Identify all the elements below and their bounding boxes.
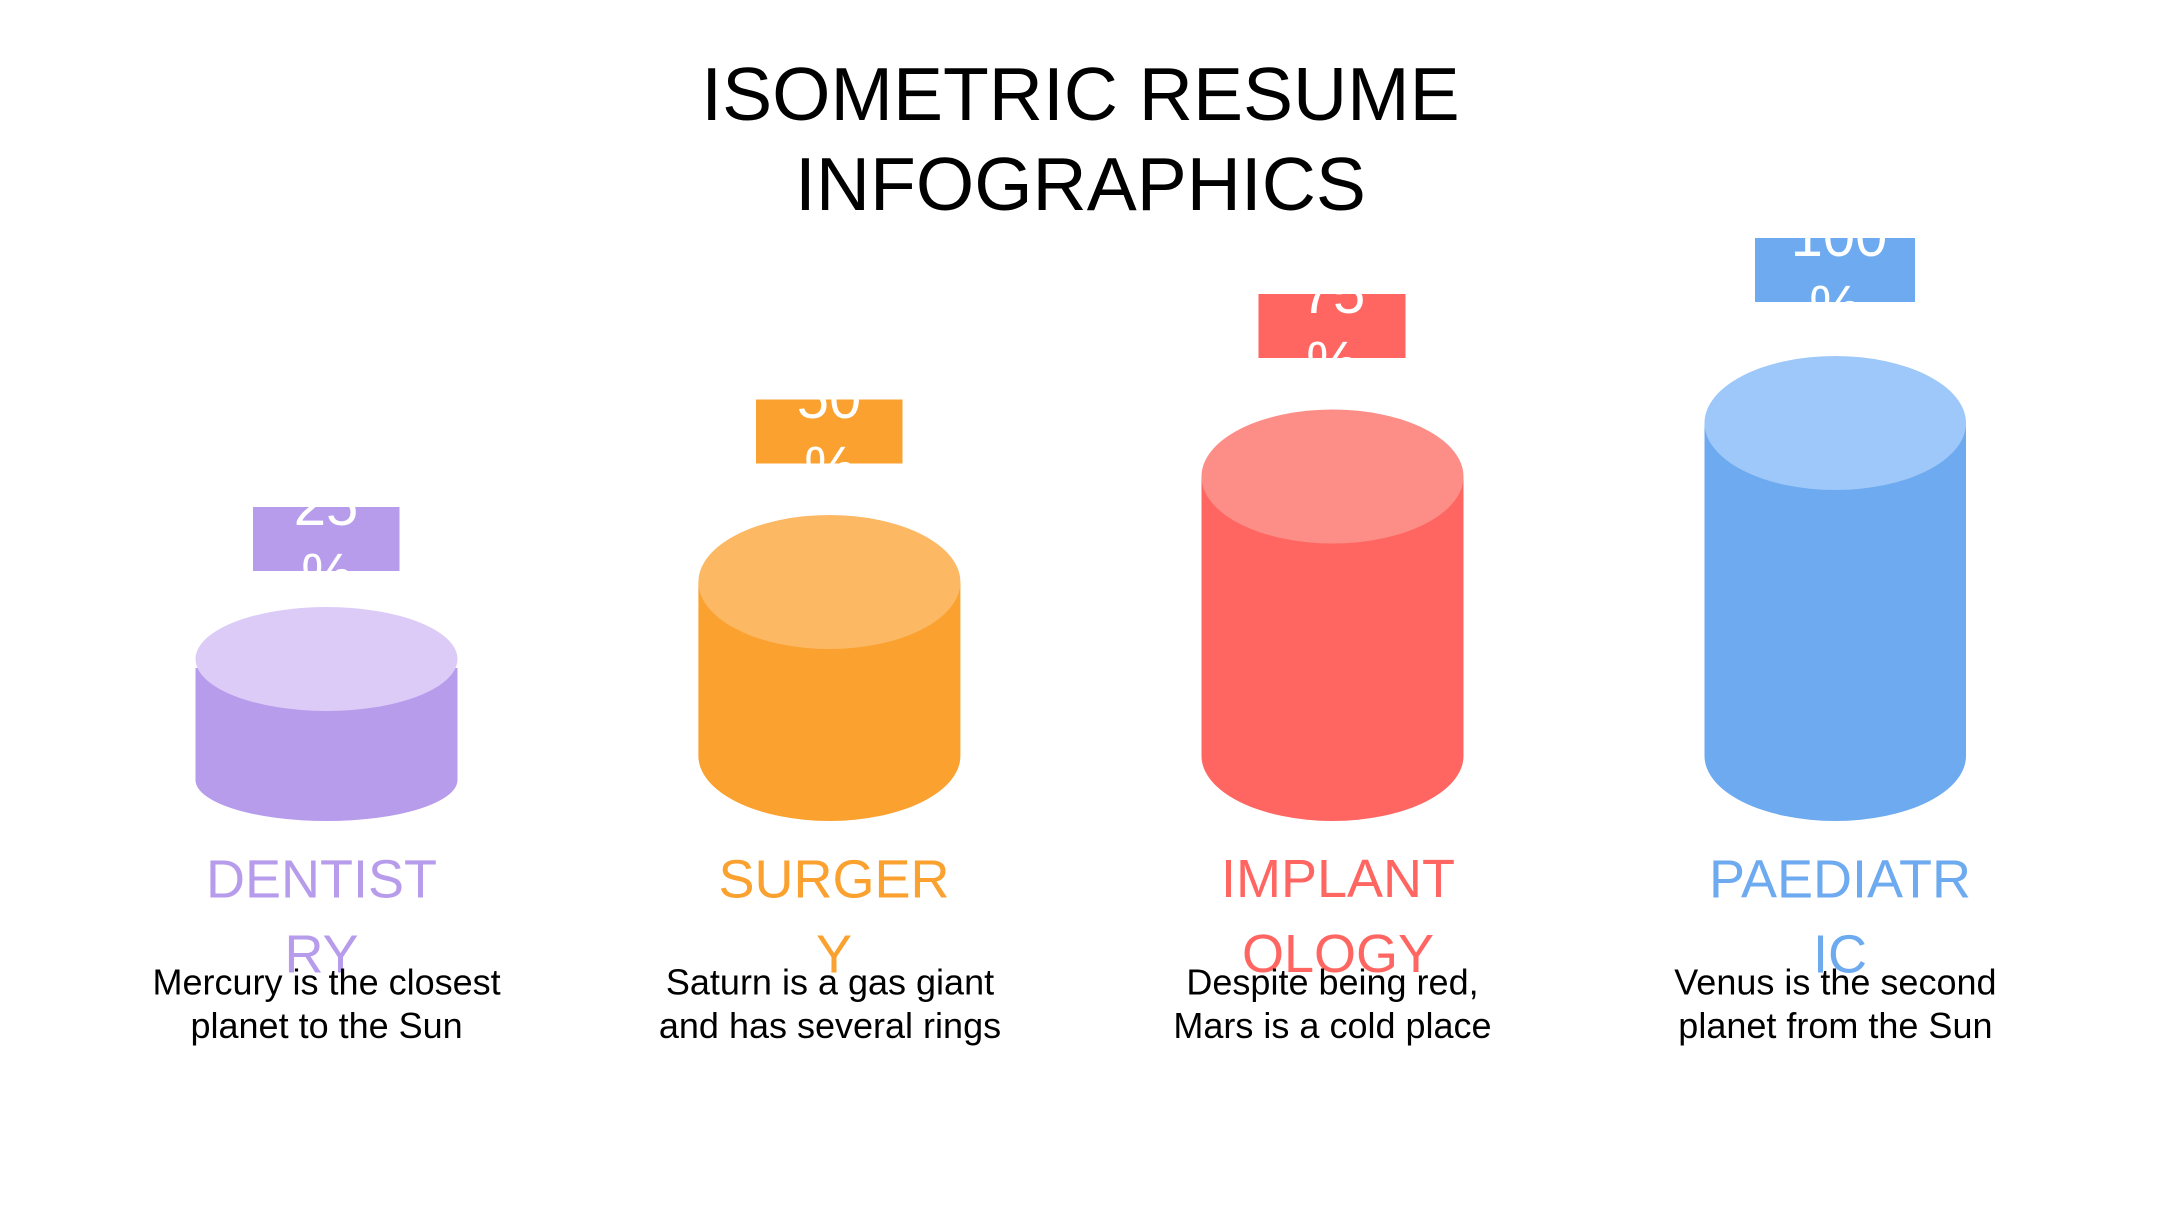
percent box: 25%: 25 — [294, 473, 358, 538]
description: mercury: planet to the Sun — [190, 1005, 463, 1046]
percent box: 50%: % — [804, 435, 856, 500]
description: venus: planet from the Sun — [1678, 1005, 1993, 1046]
heading: dentistry — [206, 850, 437, 984]
cylinder: surgery — [698, 515, 960, 821]
heading: paediatric — [1709, 850, 1971, 984]
percent box: 100%: 100 — [1791, 204, 1887, 269]
description: mercury: Mercury is the closest — [153, 962, 501, 1002]
heading: implantology — [1221, 849, 1455, 984]
panel: dentistry — [153, 473, 501, 1046]
description: saturn: and has several rings — [659, 1005, 1001, 1046]
cylinder: dentistry — [196, 607, 458, 821]
heading: paediatric: PAEDIATR — [1709, 850, 1971, 910]
percent box: 75%: 75 — [1301, 261, 1365, 326]
description: mars: Despite being red, — [1186, 962, 1479, 1002]
cylinder: paediatric — [1704, 356, 1966, 821]
percent box: 50% — [756, 366, 902, 500]
cylinder: implantology — [1202, 410, 1464, 821]
panel: implantology — [1173, 261, 1492, 1046]
description: mars: Mars is a cold place — [1173, 1005, 1492, 1046]
description: mars — [1173, 962, 1492, 1046]
heading: dentistry: DENTIST — [206, 850, 437, 910]
title — [701, 52, 1460, 226]
percent box: 75%: % — [1306, 330, 1358, 395]
heading: surgery — [718, 850, 950, 984]
heading: dentistry: RY — [284, 924, 359, 984]
percent box: 25%: % — [301, 542, 353, 607]
description: venus: Venus is the second — [1674, 962, 1997, 1002]
heading: implantology: IMPLANT — [1221, 849, 1455, 909]
title: INFOGRAPHICS — [795, 142, 1366, 226]
percent box: 100%: % — [1809, 274, 1861, 339]
description: mercury — [153, 962, 501, 1046]
panel: surgery — [659, 366, 1001, 1046]
percent box: 50%: 50 — [797, 366, 861, 431]
heading: surgery: SURGER — [718, 850, 950, 910]
panel: paediatric — [1674, 204, 1997, 1046]
heading: surgery: Y — [816, 924, 852, 984]
description: saturn — [659, 962, 1001, 1046]
heading: implantology: OLOGY — [1242, 924, 1434, 984]
percent box: 100% — [1755, 204, 1915, 339]
percent box: 25% — [253, 473, 400, 607]
description: venus — [1674, 962, 1997, 1046]
percent box: 75% — [1258, 261, 1406, 395]
description: saturn: Saturn is a gas giant — [666, 962, 994, 1002]
title: ISOMETRIC RESUME — [701, 52, 1460, 136]
heading: paediatric: IC — [1813, 924, 1867, 984]
